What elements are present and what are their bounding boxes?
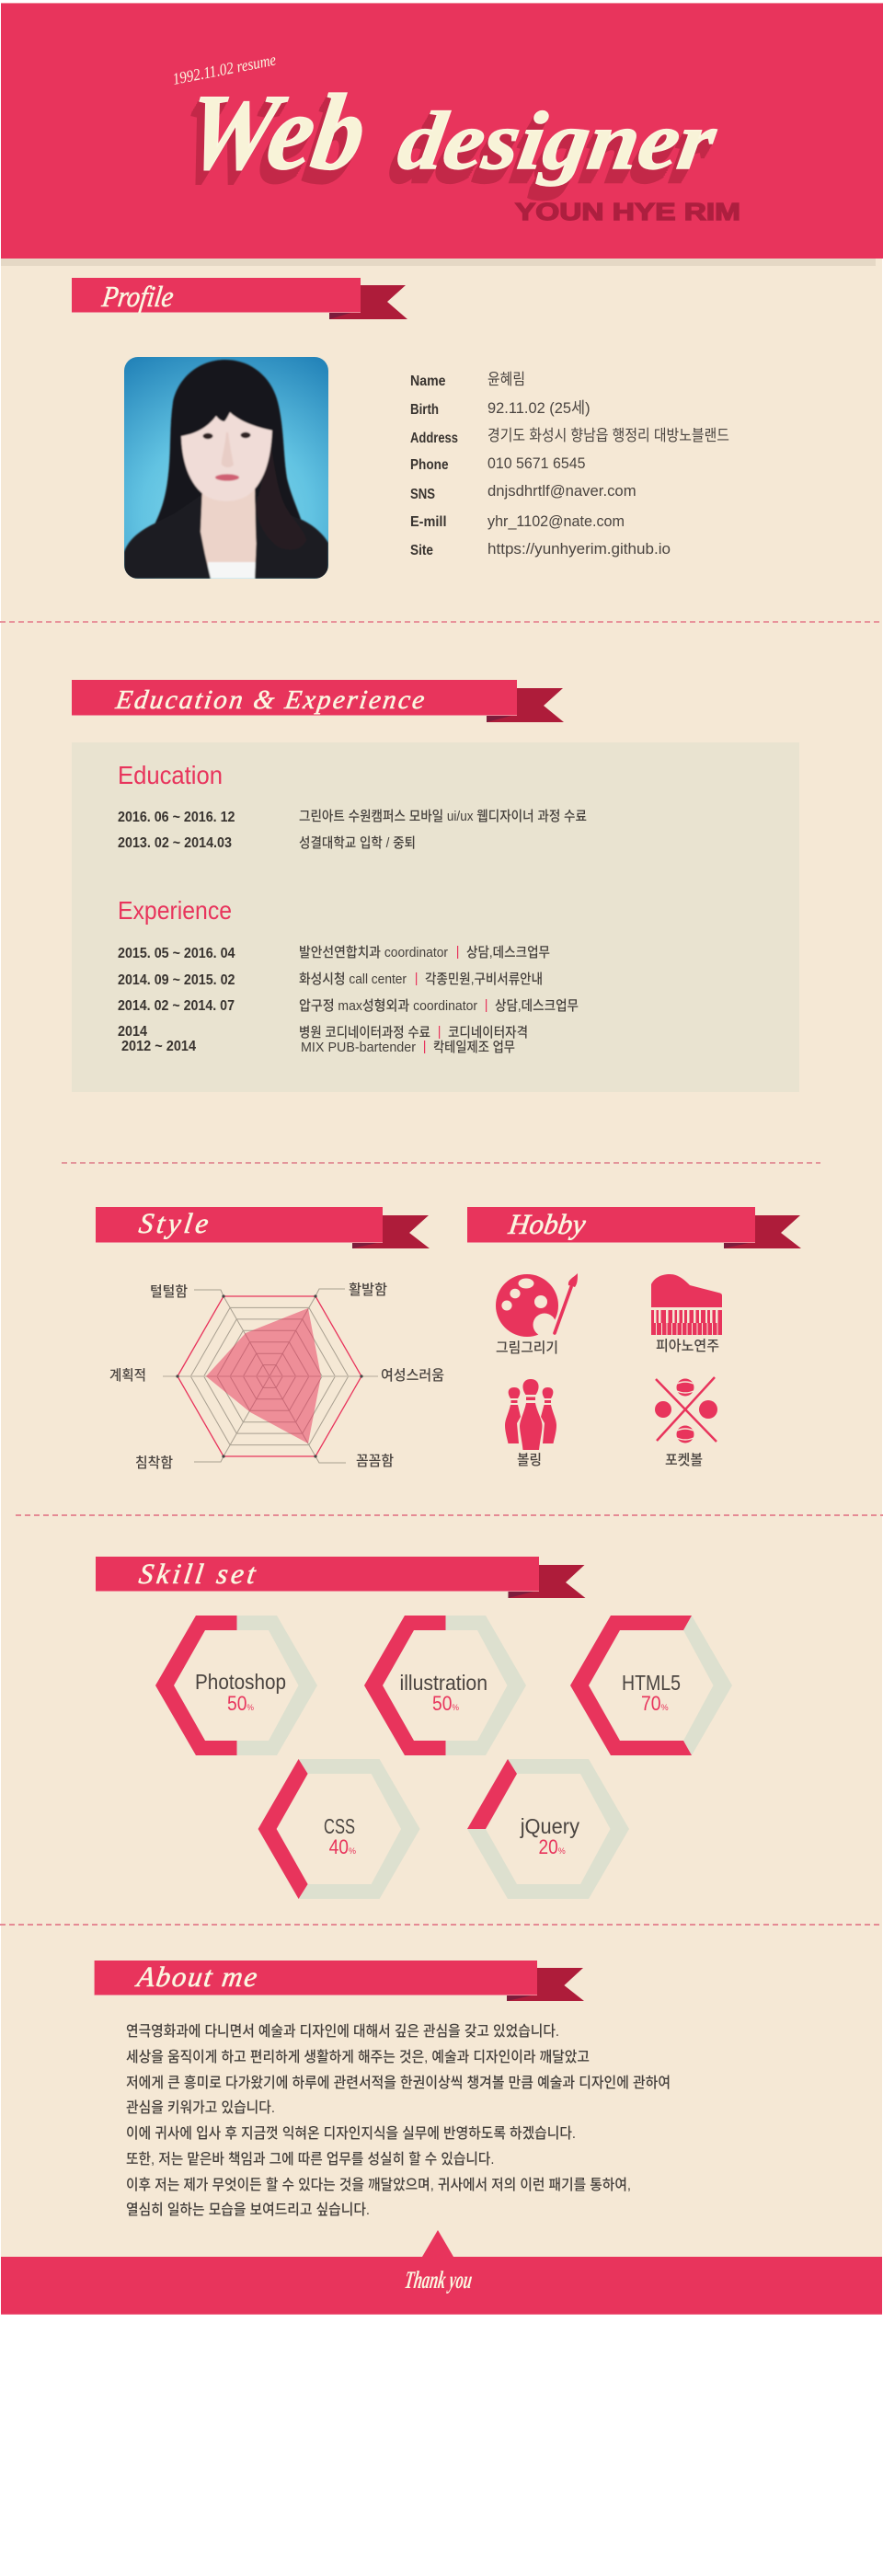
ribbon: Profile: Profile	[99, 280, 176, 313]
skill: CSS: %	[349, 1846, 356, 1856]
radar labels: 여성스러움	[381, 1367, 444, 1384]
experience rows	[118, 945, 579, 1055]
ribbon: Hobby: Hobby	[506, 1208, 588, 1240]
profile details: Birth	[410, 402, 439, 418]
label: drawing: 그림그리기	[496, 1340, 558, 1356]
ribbon: Profile	[72, 278, 407, 319]
neck	[199, 489, 258, 567]
panel: education and experience	[72, 742, 799, 1092]
radar data area	[206, 1308, 321, 1443]
experience rows: 압구정 max성형외과 coordinator	[299, 998, 477, 1014]
page background	[1, 259, 882, 2257]
experience rows: 상담,데스크업무	[466, 945, 550, 960]
jacket right	[255, 495, 328, 579]
icon: bowling pins	[505, 1379, 556, 1450]
skill: HTML5	[570, 1616, 732, 1755]
radar chart: style	[109, 1282, 444, 1471]
skill: illustration: %	[452, 1703, 459, 1712]
profile details: dnjsdhrtlf@naver.com	[487, 482, 636, 500]
experience rows: 코디네이터자격	[448, 1025, 528, 1041]
ribbon: Hobby	[467, 1207, 801, 1248]
profile details: E-mill	[410, 514, 447, 530]
skill: jQuery: jQuery	[520, 1814, 579, 1838]
skill: CSS: 40	[329, 1835, 349, 1858]
radar vertex dots	[176, 1294, 363, 1458]
heading: experience: Experience	[118, 896, 232, 925]
lips	[215, 474, 239, 481]
ribbon: Style	[96, 1207, 430, 1248]
radar labels: 활발함	[349, 1282, 387, 1298]
date caption: 1992.11.02 resume	[171, 51, 278, 88]
about me paragraph: 또한, 저는 맡은바 책임과 그에 따른 업무를 성실히 할 수 있습니다.	[126, 2151, 495, 2168]
header banner	[1, 3, 883, 266]
label: piano: 피아노연주	[656, 1338, 719, 1354]
experience rows: 화성시청 call center	[299, 972, 407, 987]
skill: jQuery	[467, 1759, 629, 1899]
skill: illustration	[364, 1616, 526, 1755]
radar outer ring	[178, 1296, 361, 1456]
shirt	[208, 562, 256, 579]
ribbon: Skill set: Skill set	[137, 1558, 258, 1590]
hair back	[155, 360, 306, 552]
profile details: Address	[410, 431, 458, 446]
skill: Photoshop: 50	[227, 1692, 247, 1715]
label: bowling: 볼링	[517, 1452, 542, 1468]
ribbon: Style: Style	[137, 1207, 211, 1239]
main title: Web	[178, 72, 374, 192]
about me paragraph: 연극영화과에 다니면서 예술과 디자인에 대해서 깊은 관심을 갖고 있었습니다.	[126, 2023, 559, 2040]
radar labels: 털털함	[150, 1283, 188, 1300]
experience rows: MIX PUB-bartender	[301, 1040, 416, 1055]
experience rows: 2014	[118, 1024, 147, 1040]
about me paragraph: 관심을 키워가고 있습니다.	[126, 2099, 275, 2116]
skill: Photoshop: Photoshop	[195, 1670, 286, 1694]
ribbon: Skill set	[96, 1557, 585, 1598]
experience rows: 2015. 05 ~ 2016. 04	[118, 946, 235, 961]
ribbon: Education & Experience	[72, 680, 564, 722]
main title	[178, 72, 723, 192]
icon: piano	[651, 1274, 722, 1335]
skill: Photoshop: %	[247, 1703, 254, 1712]
profile details: 010 5671 6545	[487, 454, 585, 472]
education rows: 2013. 02 ~ 2014.03	[118, 835, 232, 851]
profile details: Name	[410, 374, 446, 389]
profile photo	[124, 357, 328, 579]
profile details: Site	[410, 543, 433, 558]
skill: jQuery: %	[558, 1846, 566, 1856]
skill: Photoshop	[155, 1616, 317, 1755]
experience rows: 2014. 02 ~ 2014. 07	[118, 998, 235, 1014]
radar labels: 계획적	[109, 1367, 146, 1384]
education rows: 2016. 06 ~ 2016. 12	[118, 810, 235, 825]
skill: CSS: CSS	[324, 1814, 355, 1838]
experience rows: 발안선연합치과 coordinator	[299, 945, 448, 960]
about me paragraph	[126, 2023, 671, 2218]
hair right lock	[257, 451, 305, 549]
about me paragraph: 세상을 움직이게 하고 편리하게 생활하게 해주는 것은, 예술과 디자인이라 깨달았고	[126, 2049, 590, 2065]
skill: HTML5: HTML5	[622, 1671, 681, 1695]
radar grid	[163, 1289, 378, 1463]
face	[181, 409, 272, 501]
profile details: 경기도 화성시 향남읍 행정리 대방노블랜드	[487, 427, 729, 444]
profile details: https://yunhyerim.github.io	[487, 540, 671, 558]
radar labels	[109, 1282, 444, 1471]
jacket left	[124, 523, 212, 579]
ribbon: About me: About me	[133, 1961, 259, 1993]
icon: pocketball	[655, 1377, 717, 1443]
education rows: 성결대학교 입학 / 중퇴	[299, 835, 416, 851]
profile details: 92.11.02 (25세)	[487, 399, 591, 417]
experience rows: 각종민원,구비서류안내	[425, 972, 543, 987]
skill: illustration: illustration	[399, 1671, 487, 1695]
about me paragraph: 열심히 일하는 모습을 보여드리고 싶습니다.	[126, 2202, 370, 2218]
ribbon: About me	[95, 1961, 584, 2001]
name subtitle: YOUN HYE RIM	[515, 198, 740, 225]
radar labels: 침착함	[135, 1455, 173, 1471]
footer band	[1, 2230, 882, 2315]
bangs	[180, 408, 274, 437]
profile details: SNS	[410, 487, 435, 502]
ribbon: Education & Experience: Education & Experience	[113, 685, 427, 715]
education rows	[118, 809, 587, 851]
profile details: Phone	[410, 457, 449, 473]
experience rows: 2014. 09 ~ 2015. 02	[118, 972, 235, 988]
heading: education: Education	[118, 761, 223, 789]
experience rows: 칵테일제조 업무	[433, 1040, 515, 1055]
icon: palette	[496, 1273, 578, 1337]
experience rows: 병원 코디네이터과정 수료	[299, 1025, 430, 1041]
about me paragraph: 이후 저는 제가 무엇이든 할 수 있다는 것을 깨달았으며, 귀사에서 저의 이런 패기를 통하여,	[126, 2177, 631, 2193]
radar labels: 꼼꼼함	[356, 1453, 394, 1469]
skill: illustration: 50	[432, 1692, 452, 1715]
profile details: yhr_1102@nate.com	[487, 512, 625, 530]
thank you text: Thank you	[403, 2266, 474, 2294]
skill: HTML5: %	[661, 1703, 669, 1712]
skill: jQuery: 20	[539, 1835, 558, 1858]
profile details	[410, 371, 729, 558]
skill: CSS	[258, 1759, 420, 1899]
label: pocketball: 포켓볼	[665, 1452, 703, 1468]
education rows: 그린아트 수원캠퍼스 모바일 ui/ux 웹디자이너 과정 수료	[299, 809, 587, 824]
nose shade	[222, 432, 234, 467]
experience rows: 2012 ~ 2014	[121, 1039, 196, 1054]
skill: HTML5: 70	[641, 1692, 661, 1715]
profile details: 윤혜림	[487, 371, 525, 388]
experience rows: 상담,데스크업무	[495, 998, 579, 1014]
main title: designer	[393, 95, 723, 187]
eyes	[202, 433, 213, 439]
about me paragraph: 이에 귀사에 입사 후 지금껏 익혀온 디자인지식을 실무에 반영하도록 하겠습니다.	[126, 2125, 576, 2142]
about me paragraph: 저에게 큰 흥미로 다가왔기에 하루에 관련서적을 한권이상씩 챙겨볼 만큼 예술과 디자인에 관하여	[126, 2075, 671, 2091]
